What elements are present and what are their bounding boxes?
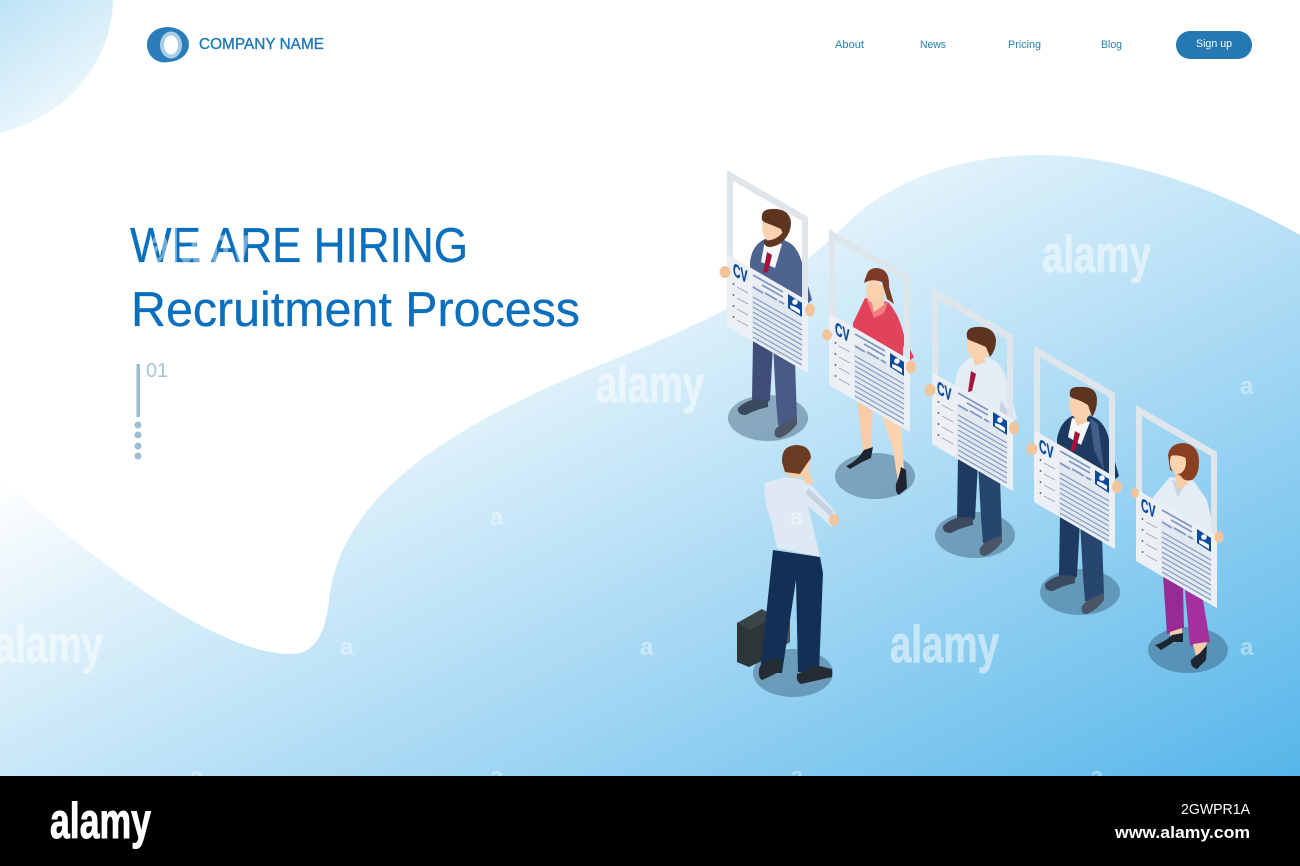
company name: COMPANY NAME xyxy=(199,36,324,53)
title: Recruitment Process xyxy=(131,283,580,337)
candidate 4: man in navy suit: CV xyxy=(1039,436,1054,465)
candidate 2: woman in red blouse: CV xyxy=(835,319,850,348)
slide indicator xyxy=(134,360,168,460)
sign up button: Sign up xyxy=(1196,38,1232,50)
small watermark marks: a xyxy=(1240,634,1254,661)
footer bar xyxy=(0,776,1300,866)
logo xyxy=(147,27,189,62)
footer bar: www.alamy.com xyxy=(1114,823,1250,842)
small watermark marks: a xyxy=(1240,373,1254,400)
candidate 1: bearded man in grey suit xyxy=(720,170,815,441)
candidate 3: man in white shirt xyxy=(924,288,1019,558)
small watermark marks: a xyxy=(340,634,354,661)
small watermark marks: a xyxy=(490,763,504,790)
candidate 4: man in navy suit xyxy=(1026,346,1122,615)
small watermark marks: a xyxy=(1090,763,1104,790)
small watermark marks: a xyxy=(790,763,804,790)
watermarks: alamy xyxy=(596,356,704,414)
small watermark marks: a xyxy=(640,634,654,661)
slide indicator: 01 xyxy=(146,360,168,382)
navigation: Pricing xyxy=(1008,39,1041,51)
watermarks: alamy xyxy=(890,616,999,674)
watermarks xyxy=(0,226,1151,674)
candidate 2: woman in red blouse xyxy=(822,229,916,499)
icon: briefcase xyxy=(737,606,790,667)
navigation: Blog xyxy=(1101,39,1122,51)
footer bar: alamy xyxy=(50,793,151,849)
navigation: About xyxy=(835,39,864,51)
title: WE ARE HIRING xyxy=(130,219,468,273)
candidate 5: woman with curly hair and purple trousers: CV xyxy=(1141,495,1156,524)
small watermark marks xyxy=(190,373,1254,790)
interviewer seen from behind with briefcase xyxy=(737,445,839,697)
candidate 5: woman with curly hair and purple trousers xyxy=(1131,405,1228,673)
sign up button xyxy=(1176,31,1252,59)
candidate 1: bearded man in grey suit: CV xyxy=(733,260,748,289)
small watermark marks: a xyxy=(490,504,504,531)
navigation: News xyxy=(920,39,946,51)
navigation xyxy=(835,39,1122,51)
watermark over title: alamy xyxy=(150,217,250,273)
candidate 3: man in white shirt: CV xyxy=(937,378,952,407)
top-left corner blob xyxy=(0,0,113,133)
small watermark marks: a xyxy=(190,763,204,790)
title xyxy=(130,219,580,337)
blue wave background xyxy=(0,155,1300,776)
watermarks: alamy xyxy=(1042,226,1151,284)
footer bar: 2GWPR1A xyxy=(1181,801,1250,818)
small watermark marks: a xyxy=(790,504,804,531)
